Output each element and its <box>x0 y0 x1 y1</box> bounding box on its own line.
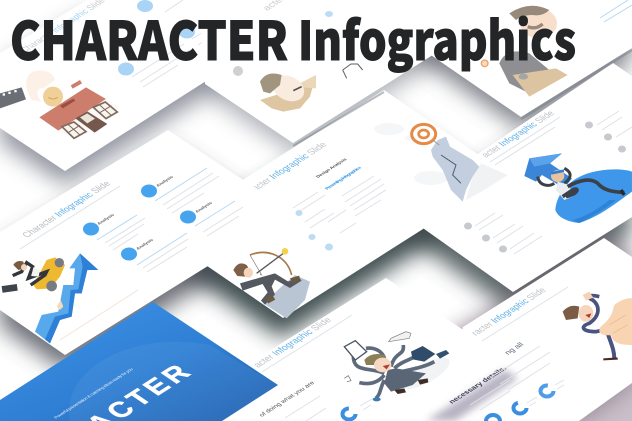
analysis item 3: Analysis <box>135 238 155 251</box>
analysis item 3 <box>121 233 188 272</box>
illustration: film strip <box>0 87 26 108</box>
analysis item 1: Analysis <box>96 213 116 226</box>
donut charts <box>342 399 372 420</box>
text: body copy: of doing what you are <box>258 380 317 418</box>
donut: middle <box>514 402 526 414</box>
analysis item 2 <box>141 168 219 213</box>
underline <box>262 315 352 372</box>
illustration: hand holding coin <box>26 70 63 107</box>
panel: top house slide <box>0 0 333 171</box>
text lines: superman slide <box>475 111 632 254</box>
donut labels <box>527 380 564 406</box>
panel: multi-armed man slide <box>230 278 560 421</box>
divider line <box>60 290 138 340</box>
slide title: arrow slide: Character Infographic Slide <box>21 180 114 240</box>
cover subtitle: Powerful presentation & catching ideas ready for you <box>53 367 135 420</box>
illustration: archer on cliff <box>233 248 310 318</box>
text block: design analysis: Design Analysis <box>315 157 348 179</box>
text: necessary details: necessary details. <box>446 365 509 405</box>
decorative light curve <box>69 342 278 421</box>
title word: CHARACTER: CHARACTER <box>10 0 288 76</box>
illustration: man on yellow scooter <box>2 257 65 310</box>
panel: top right slide <box>380 0 632 117</box>
text block: design analysis <box>293 157 386 233</box>
slide title: archer slide: acter Infographic Slide <box>250 141 330 193</box>
title word: Infographics: Infographics <box>298 0 576 76</box>
illustration: flying man with blue arrow and cape <box>524 153 632 223</box>
text lines <box>285 396 326 421</box>
analysis item 4: Analysis <box>194 201 214 214</box>
donut: left <box>342 408 356 420</box>
panel: top middle box-man slide <box>200 0 520 143</box>
underline <box>482 287 568 341</box>
panel: target mountain slide <box>159 90 508 318</box>
icon: blue circle <box>325 11 333 17</box>
text lines: top right slide <box>600 0 632 22</box>
icon: analysis circles <box>118 0 195 76</box>
slide title: multi-arm slide: acter Infographic Slide <box>252 316 335 370</box>
illustration: clouds <box>374 123 448 185</box>
illustration: man in giant hand <box>563 292 632 360</box>
slide title: superman slide: acter Infographic Slide <box>480 109 558 160</box>
panel: superman slide <box>396 63 632 292</box>
panel: rising arrow slide <box>0 130 293 355</box>
icons: feature icons <box>296 210 333 250</box>
donut charts <box>486 380 564 421</box>
illustration: small arms figure <box>343 64 363 78</box>
purple motion smear <box>426 370 518 421</box>
analysis item 4 <box>180 201 243 236</box>
title <box>10 0 576 76</box>
icon: orange target <box>412 124 439 145</box>
donut: left <box>486 415 500 421</box>
shadow cast by box-man slide <box>293 92 384 146</box>
analysis item 1 <box>83 213 145 250</box>
illustration: man with target <box>481 6 568 97</box>
illustration: mountain peak <box>431 137 508 202</box>
text lines: house slide <box>132 0 248 87</box>
illustration: house <box>39 80 119 139</box>
panel: blue cover slide <box>0 302 278 421</box>
panel: giant hand slide <box>426 238 632 421</box>
text lines <box>470 346 550 410</box>
illustration: multi-armed businessman <box>344 332 454 401</box>
text: blue subheading: Presenting Infographics <box>324 165 363 191</box>
underline <box>20 186 120 249</box>
illustration: rising blue arrow <box>35 253 98 343</box>
illustration: man in box <box>260 70 316 112</box>
icons: grey feature icons <box>464 122 626 252</box>
slide title: giant hand slide: racter Infographic Slide <box>470 286 549 338</box>
donut: label <box>360 399 372 410</box>
icon: faint gear <box>233 66 243 76</box>
donut: right <box>540 386 554 396</box>
shadow cast by top right slide <box>521 50 632 119</box>
text: heading fragments: ng all <box>502 341 526 356</box>
bottom right corner tint <box>579 383 632 421</box>
analysis item 2: Analysis <box>155 175 175 188</box>
